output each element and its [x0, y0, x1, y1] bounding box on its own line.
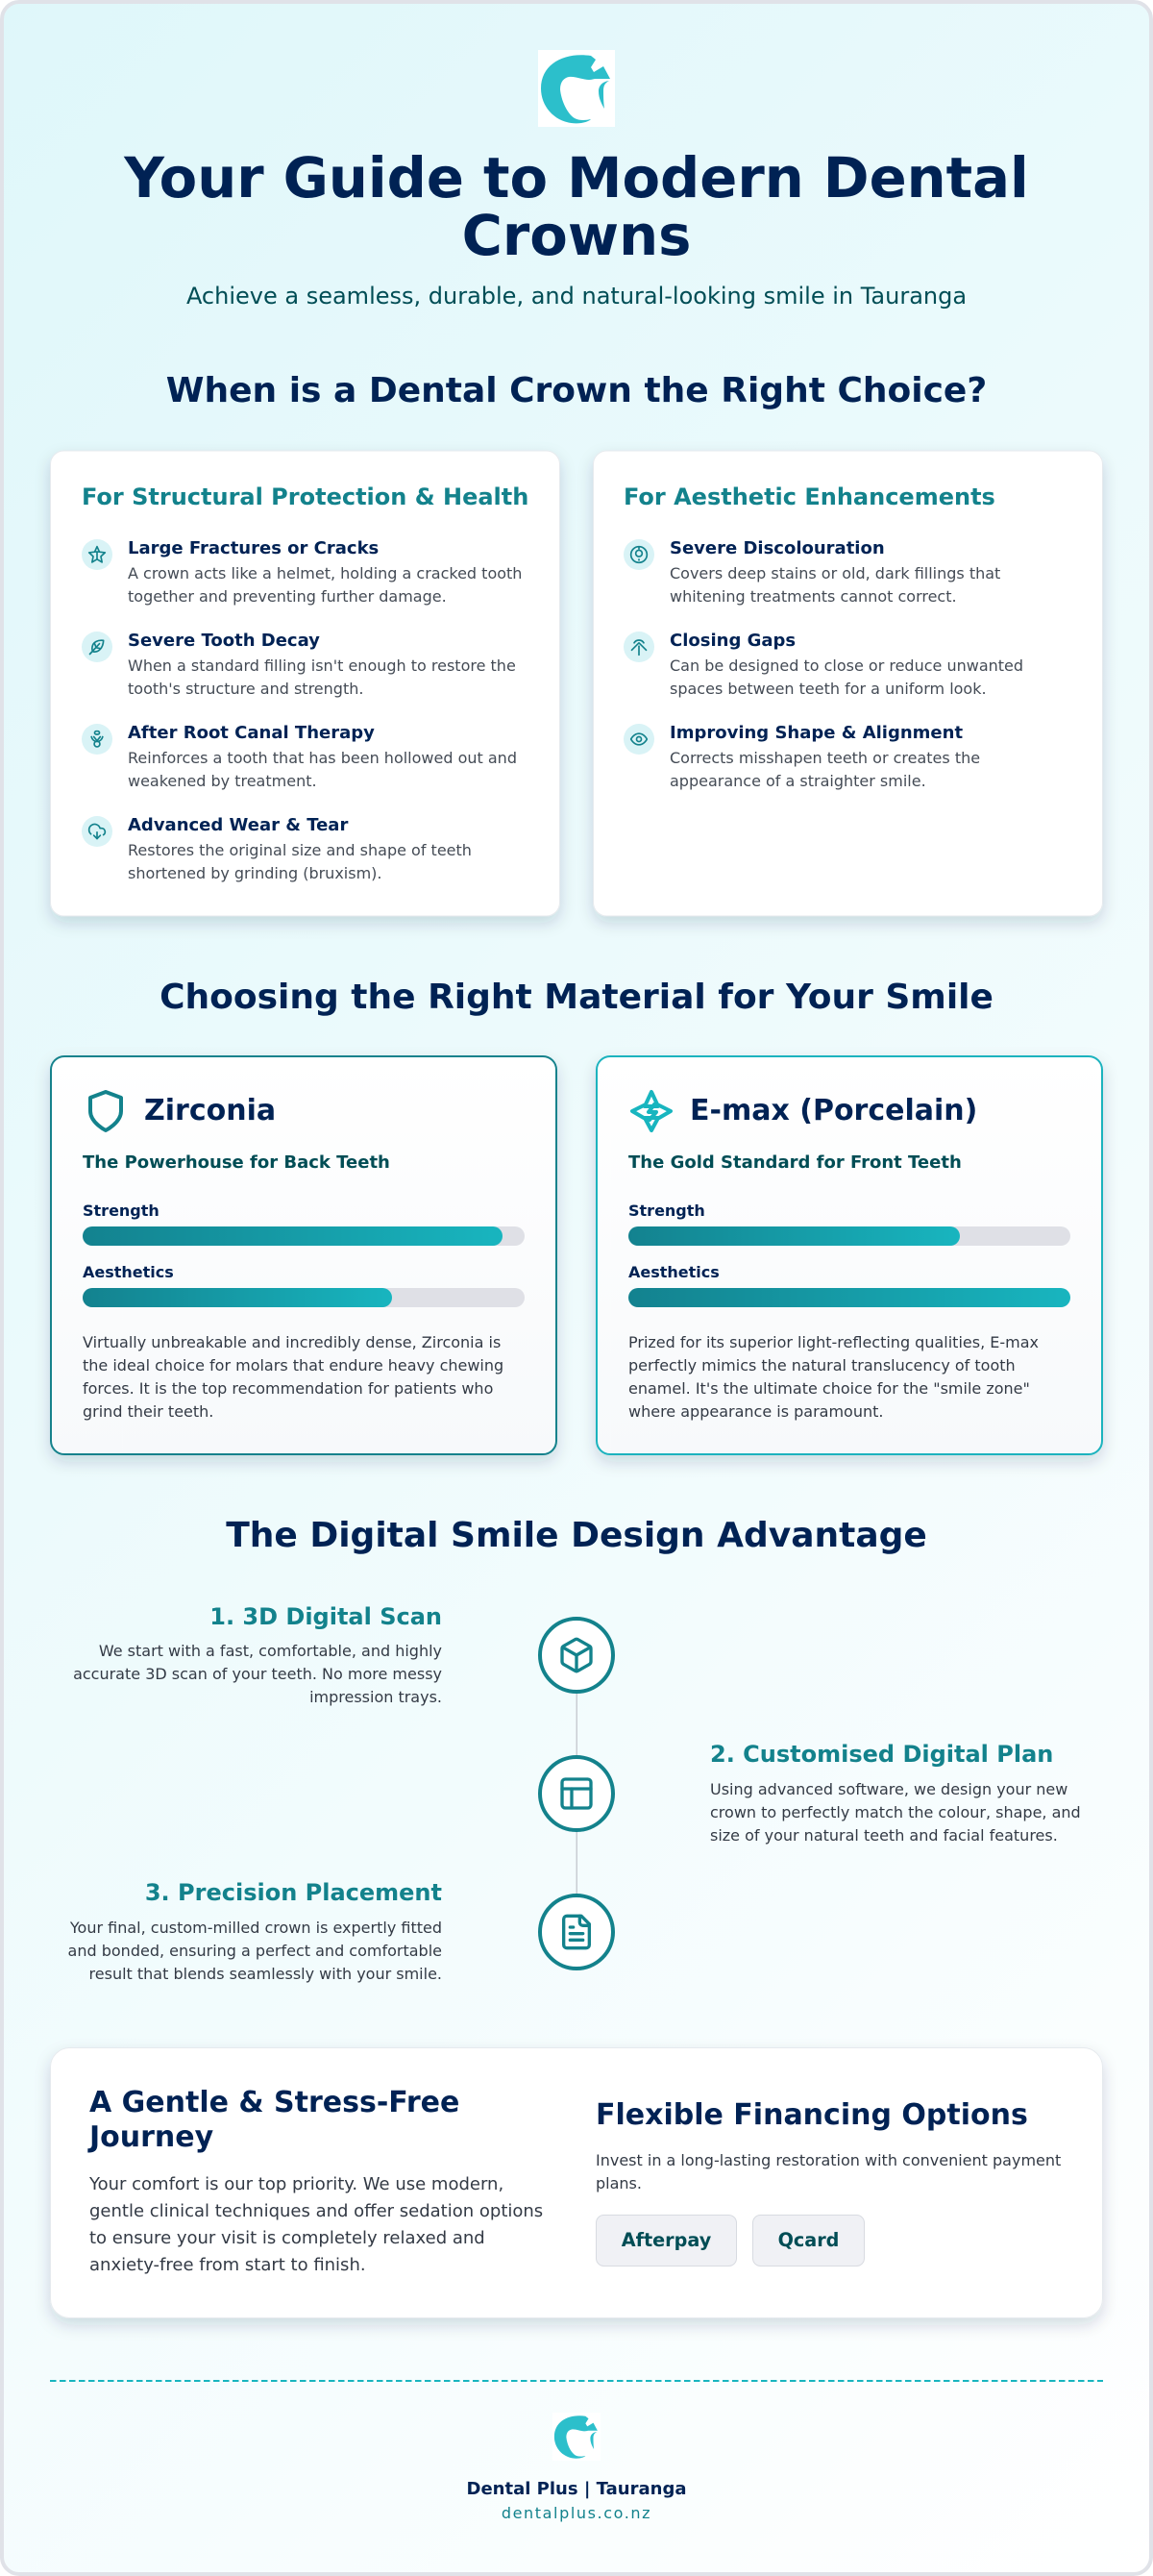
- step 3: 3. Precision Placement: [145, 1879, 442, 1906]
- step 1: impression trays.: [309, 1688, 442, 1706]
- icon: logo: [538, 50, 615, 127]
- panel: structural protection: [50, 451, 559, 916]
- step 3: and bonded, ensuring a perfect and comfortable: [68, 1942, 442, 1960]
- item: fractures: A crown acts like a helmet, holding a cracked tooth: [128, 564, 522, 582]
- description: forces. It is the top recommendation for patients who: [83, 1379, 493, 1398]
- material tagline: The Gold Standard for Front Teeth: [628, 1152, 962, 1173]
- item: shape: Improving Shape & Alignment: [670, 723, 963, 743]
- comfort text: gentle clinical techniques and offer sedation options: [89, 2201, 543, 2221]
- financing text: Invest in a long-lasting restoration with convenient payment: [596, 2151, 1061, 2169]
- panel: zirconia: [51, 1056, 556, 1454]
- financing text: plans.: [596, 2174, 642, 2192]
- bar: strength: Strength: [628, 1201, 705, 1220]
- financing heading: Flexible Financing Options: [596, 2098, 1028, 2132]
- timeline: [68, 1603, 1081, 1983]
- item: root canal: weakened by treatment.: [128, 772, 317, 790]
- item: decay: tooth's structure and strength.: [128, 680, 363, 698]
- description: Prized for its superior light-reflecting qualities, E-max: [628, 1333, 1039, 1351]
- item: fractures: together and preventing further damage.: [128, 587, 447, 606]
- description: the ideal choice for molars that endure heavy chewing: [83, 1356, 503, 1375]
- item: root canal: Reinforces a tooth that has been hollowed out and: [128, 749, 517, 767]
- heading: when is a crown right: When is a Dental Crown the Right Choice?: [166, 371, 987, 410]
- footer: [467, 2413, 686, 2522]
- card heading: For Aesthetic Enhancements: [624, 483, 995, 510]
- material tagline: The Powerhouse for Back Teeth: [83, 1152, 390, 1173]
- comfort heading: A Gentle & Stress-Free: [89, 2086, 459, 2119]
- description: perfectly mimics the natural translucency of tooth: [628, 1356, 1016, 1375]
- item: wear: Restores the original size and shape of teeth: [128, 841, 472, 859]
- panel: comfort and financing: [50, 2047, 1103, 2318]
- step 1: 1. 3D Digital Scan: [209, 1603, 442, 1630]
- title: Your Guide to Modern Dental: [123, 146, 1029, 211]
- icon: footer logo: [552, 2413, 601, 2461]
- website: dentalplus.co.nz: [502, 2504, 651, 2522]
- bar: aesthetics: Aesthetics: [83, 1263, 174, 1281]
- step 3: [68, 1879, 613, 1983]
- item: root canal: [82, 723, 517, 790]
- bar: strength: [628, 1201, 1070, 1246]
- step 2: 2. Customised Digital Plan: [710, 1741, 1053, 1768]
- step 2: crown to perfectly match the colour, shape, and: [710, 1803, 1081, 1821]
- item: wear: [82, 815, 472, 882]
- material name: Zirconia: [144, 1094, 276, 1127]
- bar: aesthetics: [83, 1263, 525, 1307]
- comfort text: Your comfort is our top priority. We use modern,: [88, 2174, 503, 2194]
- title: Crowns: [462, 204, 691, 268]
- bar: aesthetics: Aesthetics: [628, 1263, 720, 1281]
- item: closing gaps: Can be designed to close or reduce unwanted: [670, 656, 1023, 675]
- button: qcard: Qcard: [778, 2229, 839, 2251]
- item: discolouration: [624, 538, 1000, 606]
- item: fractures: Large Fractures or Cracks: [128, 538, 379, 558]
- step 3: Your final, custom-milled crown is expertly fitted: [69, 1919, 442, 1937]
- bar: strength: [83, 1201, 525, 1246]
- step 2: [540, 1741, 1081, 1845]
- bar: strength: Strength: [83, 1201, 159, 1220]
- step 1: We start with a fast, comfortable, and highly: [99, 1642, 442, 1660]
- description: grind their teeth.: [83, 1402, 213, 1421]
- item: wear: Advanced Wear & Tear: [128, 815, 348, 835]
- heading: digital advantage: The Digital Smile Design Advantage: [226, 1516, 927, 1555]
- item: closing gaps: spaces between teeth for a uniform look.: [670, 680, 987, 698]
- item: decay: Severe Tooth Decay: [128, 631, 320, 651]
- material name: E-max (Porcelain): [690, 1094, 977, 1127]
- comfort heading: Journey: [87, 2120, 214, 2154]
- description: enamel. It's the ultimate choice for the "smile zone": [628, 1379, 1030, 1398]
- step 2: size of your natural teeth and facial features.: [710, 1826, 1058, 1845]
- item: fractures: [82, 538, 522, 606]
- bar: aesthetics: [628, 1263, 1070, 1307]
- item: closing gaps: [624, 631, 1023, 698]
- panel: e-max: [597, 1056, 1102, 1454]
- comfort text: anxiety-free from start to finish.: [89, 2255, 366, 2275]
- clinic name: Dental Plus | Tauranga: [467, 2479, 686, 2499]
- item: root canal: After Root Canal Therapy: [128, 723, 375, 743]
- header: [123, 50, 1029, 310]
- item: decay: When a standard filling isn't enough to restore the: [128, 656, 516, 675]
- step 1: accurate 3D scan of your teeth. No more messy: [73, 1665, 442, 1683]
- item: shape: appearance of a straighter smile.: [670, 772, 926, 790]
- icon: shield: [90, 1092, 121, 1130]
- step 2: Using advanced software, we design your new: [710, 1780, 1067, 1798]
- item: discolouration: whitening treatments cannot correct.: [670, 587, 957, 606]
- button: afterpay: Afterpay: [622, 2229, 712, 2251]
- item: wear: shortened by grinding (bruxism).: [128, 864, 381, 882]
- item: shape: [624, 723, 980, 790]
- item: discolouration: Severe Discolouration: [670, 538, 885, 558]
- button: qcard: [753, 2215, 865, 2266]
- item: decay: [82, 631, 516, 698]
- button: afterpay: [596, 2215, 736, 2266]
- description: Virtually unbreakable and incredibly dense, Zirconia is: [83, 1333, 501, 1351]
- item: discolouration: Covers deep stains or old, dark fillings that: [670, 564, 1000, 582]
- heading: choosing material: Choosing the Right Material for Your Smile: [159, 978, 994, 1017]
- subtitle: Achieve a seamless, durable, and natural-looking smile in Tauranga: [186, 283, 967, 310]
- icon: e-max star: [632, 1092, 671, 1130]
- connector line: [576, 1692, 577, 1895]
- panel: aesthetic enhancements: [594, 451, 1103, 916]
- step 1: [73, 1603, 613, 1706]
- card heading: For Structural Protection & Health: [82, 483, 528, 510]
- item: closing gaps: Closing Gaps: [670, 631, 796, 651]
- item: shape: Corrects misshapen teeth or creates the: [670, 749, 980, 767]
- step 3: result that blends seamlessly with your smile.: [89, 1965, 442, 1983]
- comfort text: to ensure your visit is completely relaxed and: [89, 2228, 485, 2248]
- description: where appearance is paramount.: [628, 1402, 883, 1421]
